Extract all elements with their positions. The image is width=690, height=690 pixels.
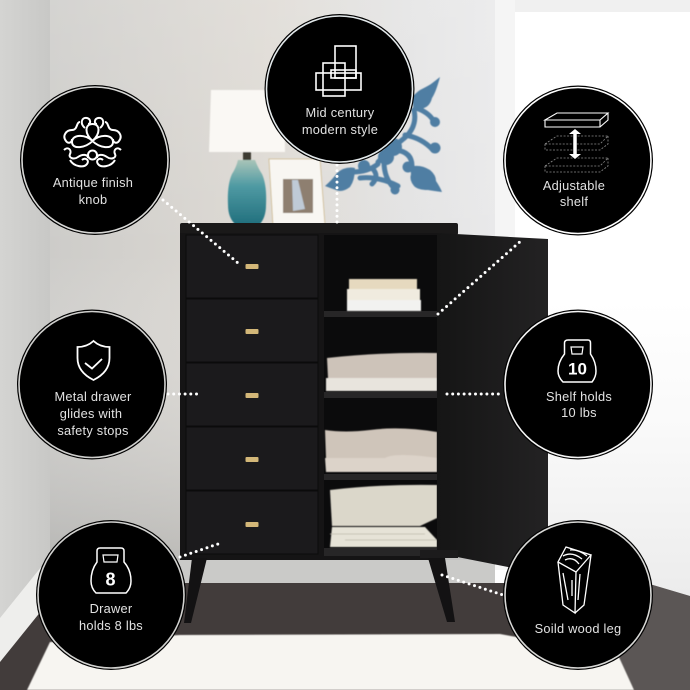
dotted leader lines	[163, 165, 522, 595]
label: Shelf holds	[546, 389, 612, 404]
callout: adjustable shelf	[503, 86, 653, 236]
folded linens	[325, 353, 437, 547]
icon: shield with check	[78, 341, 110, 380]
label: 10 lbs	[561, 405, 597, 420]
label: shelf	[560, 194, 588, 209]
icon: shelf with arrow	[545, 113, 608, 172]
icon: kettlebell 10	[558, 340, 596, 382]
open door	[437, 233, 548, 572]
icon: overlapping rectangles	[316, 46, 361, 96]
label: glides with	[60, 406, 122, 421]
cabinet carcass	[180, 223, 458, 235]
label: Antique finish	[53, 175, 133, 190]
label: Metal drawer	[55, 389, 132, 404]
bottom plank	[420, 550, 458, 558]
icon: kettlebell 8	[91, 548, 131, 593]
label	[546, 389, 612, 420]
label: Mid century	[306, 105, 375, 120]
callout: solid wood leg	[503, 520, 653, 670]
callout: metal drawer glides	[17, 310, 167, 460]
open shelf interior	[324, 235, 438, 549]
stack of books	[347, 279, 421, 311]
picture frame	[269, 159, 325, 226]
drawers	[186, 235, 318, 554]
label: knob	[79, 192, 107, 207]
label	[55, 389, 132, 438]
cabinet	[180, 223, 548, 623]
label	[53, 175, 133, 207]
icon: ornate knob	[64, 118, 121, 166]
callout: drawer holds 8 lbs	[36, 520, 186, 670]
callout: antique finish knob	[20, 85, 170, 235]
shelves	[324, 311, 438, 556]
label: safety stops	[57, 423, 129, 438]
wall ornament	[325, 77, 442, 194]
icon: kettlebell 10: 10	[568, 360, 587, 378]
label: holds 8 lbs	[79, 618, 143, 633]
label: Drawer	[90, 601, 133, 616]
callout: mid century modern style	[264, 14, 414, 164]
label	[543, 178, 605, 209]
drawer handles	[246, 264, 258, 527]
callout: shelf holds 10 lbs	[503, 310, 653, 460]
label: Soild wood leg	[535, 621, 621, 636]
label: Adjustable	[543, 178, 605, 193]
label	[79, 601, 143, 633]
label: modern style	[302, 122, 378, 137]
icon: kettlebell 8: 8	[105, 570, 116, 590]
table lamp	[209, 90, 285, 225]
label	[302, 105, 378, 137]
cabinet legs	[184, 558, 455, 623]
icon: wood block	[558, 547, 591, 613]
